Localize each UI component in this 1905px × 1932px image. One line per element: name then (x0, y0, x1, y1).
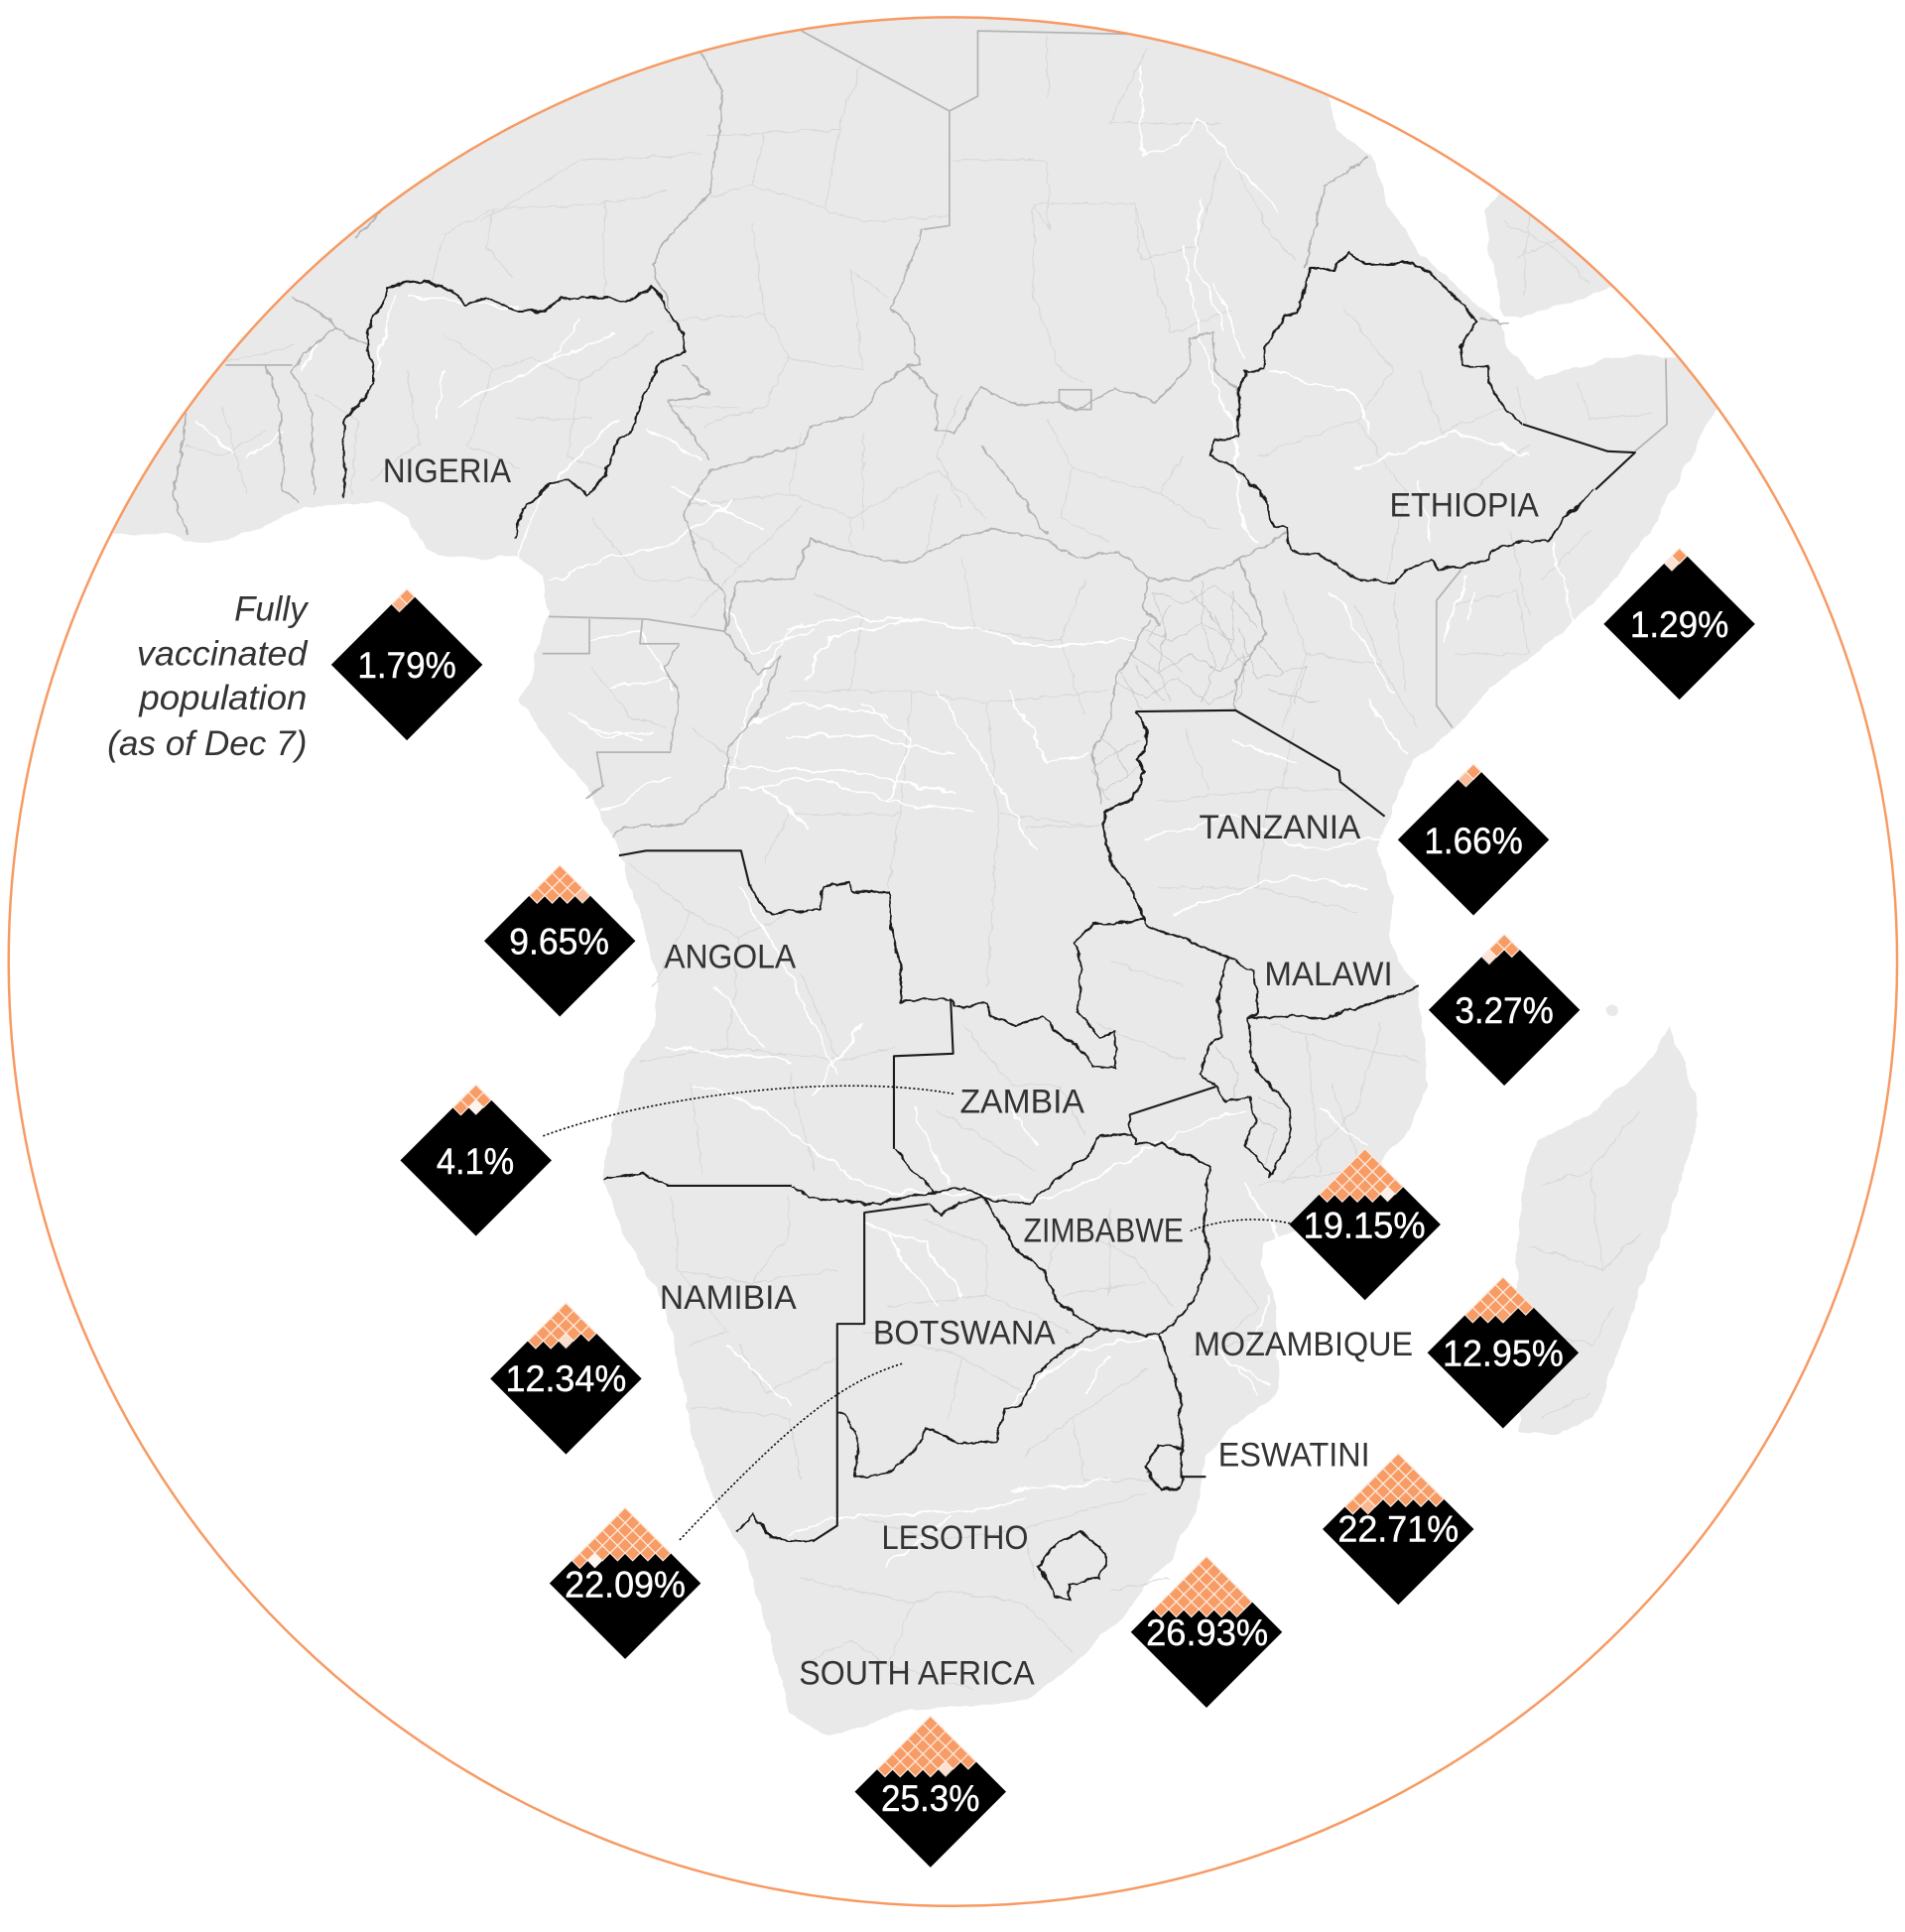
dense district mesh: Uganda and Rwanda (1091, 580, 1320, 1165)
land: Madagascar (1513, 1026, 1699, 1437)
diamond: 1.66%: 1.66% (1424, 821, 1523, 861)
legend note: fully vaccinated population: (as of Dec 7) (107, 725, 307, 763)
legend note: fully vaccinated population: Fully (234, 591, 310, 629)
highlighted borders: southern Africa (603, 850, 1419, 1601)
country labels: NAMIBIA (660, 1279, 797, 1317)
diamond: 1.29% (1603, 549, 1755, 700)
diamond: 22.71%: 22.71% (1337, 1508, 1459, 1549)
diamond: 4.1% (400, 1085, 552, 1236)
diamond: 9.65%: 9.65% (509, 921, 609, 962)
diamond: 26.93%: 26.93% (1146, 1612, 1268, 1653)
diamond: 12.95%: 12.95% (1443, 1333, 1564, 1373)
diamond: 4.1%: 4.1% (437, 1141, 514, 1182)
highlighted borders: Nigeria (344, 281, 685, 539)
rivers (197, 67, 1579, 1566)
country labels: ETHIOPIA (1390, 487, 1539, 525)
diamond: 19.15%: 19.15% (1304, 1206, 1426, 1246)
country labels: BOTSWANA (873, 1315, 1056, 1352)
country borders (grey, natural) (174, 53, 1510, 837)
diamond: 22.09%: 22.09% (565, 1564, 686, 1605)
highlighted borders: Tanzania (1104, 710, 1385, 971)
country labels: ZIMBABWE (1023, 1212, 1184, 1249)
country labels: ANGOLA (664, 939, 796, 976)
diamond: 22.09% (550, 1507, 700, 1659)
diamond: 3.27% (1429, 935, 1580, 1086)
diamond: 25.3%: 25.3% (881, 1778, 979, 1819)
land: Comoros island (1605, 1005, 1617, 1017)
diamond: 19.15% (1289, 1149, 1441, 1300)
diamond: 1.79%: 1.79% (357, 645, 456, 686)
country labels: SOUTH AFRICA (799, 1655, 1035, 1693)
country labels (383, 452, 1539, 1693)
diamond: 3.27%: 3.27% (1455, 990, 1554, 1031)
country labels: TANZANIA (1200, 809, 1361, 846)
legend note: fully vaccinated population (107, 591, 310, 763)
diamond: 26.93% (1131, 1557, 1282, 1708)
diamond: 22.71% (1323, 1454, 1473, 1605)
diamond: 1.66% (1398, 764, 1549, 916)
legend note: fully vaccinated population: population (138, 680, 307, 717)
dotted leader: Botswana (680, 1363, 901, 1540)
country labels: NIGERIA (383, 452, 511, 490)
country labels: MOZAMBIQUE (1194, 1326, 1413, 1363)
diamond: 1.79% (331, 589, 482, 740)
country labels: ESWATINI (1218, 1437, 1370, 1475)
dotted leader: Zambia (544, 1086, 953, 1136)
diamond: 12.95% (1428, 1277, 1579, 1429)
highlighted borders: Ethiopia (1208, 253, 1635, 583)
country borders (grey, straight) (225, 31, 1667, 787)
administrative subdivisions (185, 37, 1652, 1690)
legend note: fully vaccinated population: vaccinated (137, 635, 309, 673)
diamond: 12.34% (490, 1303, 642, 1455)
country labels: LESOTHO (882, 1519, 1028, 1557)
dotted leader: Zimbabwe (1191, 1220, 1295, 1230)
land: Arabian peninsula (1484, 193, 1611, 318)
diamond: 1.29%: 1.29% (1630, 604, 1728, 645)
diamond: 9.65% (484, 865, 635, 1016)
country labels: ZAMBIA (959, 1084, 1084, 1121)
country labels: MALAWI (1264, 956, 1393, 993)
diamond: 25.3% (855, 1716, 1006, 1868)
diamond: 12.34%: 12.34% (506, 1358, 626, 1399)
